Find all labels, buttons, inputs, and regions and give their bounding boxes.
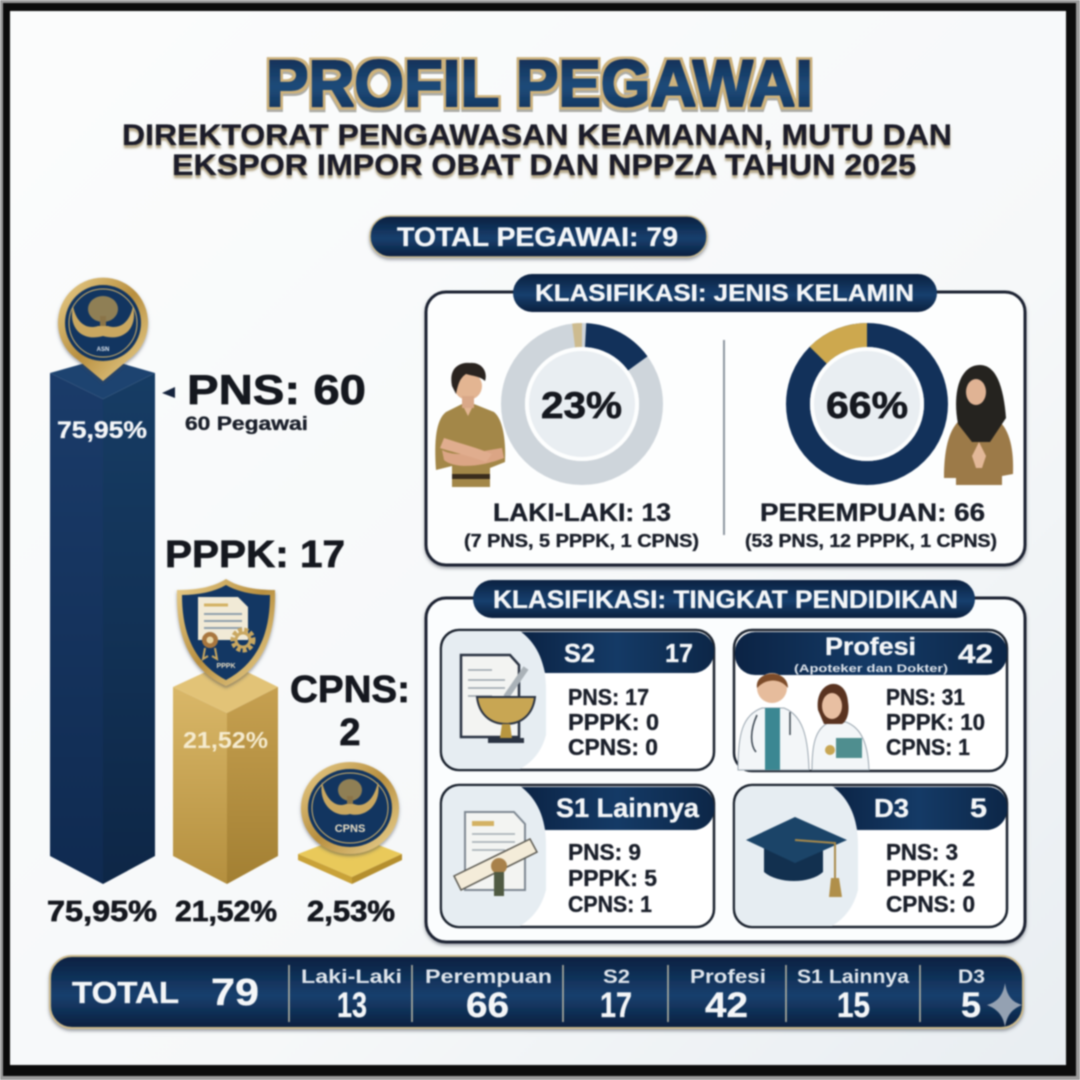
panel heading: jenis kelamin: KLASIFIKASI: JENIS KELAMIN xyxy=(535,280,914,307)
card: D3: 5 xyxy=(970,793,987,823)
perempuan caption: (53 PNS, 12 PPPK, 1 CPNS) xyxy=(745,531,997,551)
card: Profesi: 42 xyxy=(958,639,993,669)
subtitle: EKSPOR IMPOR OBAT DAN NPPZA TAHUN 2025 xyxy=(172,149,916,182)
percentages under bars xyxy=(47,896,395,928)
card: Profesi: CPNS: 1 xyxy=(886,734,970,760)
card: S2 xyxy=(441,630,714,770)
summary bar: 79 xyxy=(211,972,259,1014)
panel heading: jenis kelamin xyxy=(513,274,937,312)
label: CPNS 2: CPNS: xyxy=(290,669,410,711)
label: CPNS 2 xyxy=(290,669,410,754)
card: S2: PNS: 17 xyxy=(568,684,649,710)
badge: CPNS medal xyxy=(301,762,399,854)
laki-laki caption: (7 PNS, 5 PPPK, 1 CPNS) xyxy=(464,531,699,551)
label: PPPK 17: PPPK: 17 xyxy=(165,534,345,576)
subtitle: DIREKTORAT PENGAWASAN KEAMANAN, MUTU DAN xyxy=(122,119,952,152)
divider xyxy=(723,340,725,535)
figure: laki-laki xyxy=(435,363,505,487)
figure: doctors xyxy=(738,673,869,770)
laki-laki caption: LAKI-LAKI: 13 xyxy=(493,499,671,527)
summary bar: S1 Lainnya xyxy=(797,967,909,988)
summary bar: 66 xyxy=(466,986,509,1025)
card: Profesi: PPPK: 10 xyxy=(886,709,985,735)
percentages under bars: 75,95% xyxy=(47,896,157,928)
card: S1 Lainnya: S1 Lainnya xyxy=(556,793,700,823)
bar: PNS: 75,95% xyxy=(57,417,147,444)
card: Profesi: PNS: 31 xyxy=(886,684,965,710)
card: D3: PNS: 3 xyxy=(886,839,958,865)
bar: PNS xyxy=(50,358,155,884)
title: PROFIL PEGAWAI xyxy=(266,46,813,120)
icon: mortar and document xyxy=(461,655,535,743)
card: D3: D3 xyxy=(874,793,909,823)
panel: tingkat pendidikan xyxy=(426,580,1025,942)
icon: sparkle watermark xyxy=(987,983,1022,1027)
label: PNS 60: PNS: 60 xyxy=(187,366,366,413)
summary bar: 15 xyxy=(837,986,870,1025)
icon: diploma xyxy=(454,812,537,896)
percentages under bars: 2,53% xyxy=(307,896,395,928)
donut: laki-laki xyxy=(513,335,651,473)
summary bar: S2 xyxy=(603,967,630,988)
badge: PPPK shield: PPPK xyxy=(216,663,236,670)
card: S2: PPPK: 0 xyxy=(568,709,659,735)
card: D3: CPNS: 0 xyxy=(886,891,975,917)
card: S1 Lainnya: PNS: 9 xyxy=(568,839,641,865)
bar: CPNS plinth xyxy=(298,834,402,884)
panel: jenis kelamin xyxy=(426,274,1025,565)
summary bar: Profesi xyxy=(690,967,766,988)
card: Profesi: Profesi xyxy=(825,633,916,661)
badge: PPPK shield xyxy=(177,579,275,686)
perempuan caption xyxy=(745,499,997,551)
summary bar: 5 xyxy=(961,986,981,1025)
perempuan caption: PEREMPUAN: 66 xyxy=(760,499,985,527)
label: PNS 60: 60 Pegawai xyxy=(185,414,308,435)
bar: PPPK: 21,52% xyxy=(183,727,268,753)
badge: CPNS medal: CPNS xyxy=(335,823,365,835)
card: Profesi xyxy=(734,630,1007,771)
total pegawai pill: TOTAL PEGAWAI: 79 xyxy=(397,222,678,252)
summary bar: D3 xyxy=(958,967,985,988)
donut: perempuan xyxy=(798,335,936,473)
donut: laki-laki: 23% xyxy=(541,385,622,426)
panel heading: tingkat pendidikan: KLASIFIKASI: TINGKAT PENDIDIKAN xyxy=(493,586,958,614)
bar: PPPK xyxy=(173,662,278,884)
card: D3: PPPK: 2 xyxy=(886,865,975,891)
badge: PNS emblem: ASN xyxy=(97,347,109,353)
summary bar: TOTAL xyxy=(72,975,179,1010)
card: D3 xyxy=(734,785,1007,927)
card: S1 Lainnya xyxy=(441,785,714,927)
percentages under bars: 21,52% xyxy=(175,896,277,928)
icon: graduation cap xyxy=(746,817,847,897)
summary bar: Laki-Laki xyxy=(301,967,402,988)
summary bar: 42 xyxy=(705,986,748,1025)
badge: PNS emblem xyxy=(58,278,148,381)
label: CPNS 2: 2 xyxy=(339,712,361,754)
summary bar xyxy=(50,956,1023,1028)
summary bar: 13 xyxy=(337,986,367,1025)
label: PNS 60 xyxy=(185,366,366,435)
card: S1 Lainnya: CPNS: 1 xyxy=(568,891,652,917)
total pegawai pill xyxy=(370,216,707,257)
card: S2: 17 xyxy=(665,638,693,668)
arrow: PNS xyxy=(162,387,175,398)
laki-laki caption xyxy=(464,499,699,551)
donut: perempuan: 66% xyxy=(826,385,908,426)
subtitle xyxy=(122,119,952,182)
card: Profesi: (Apoteker dan Dokter) xyxy=(794,663,948,675)
card: S1 Lainnya: PPPK: 5 xyxy=(568,865,657,891)
card: S2: S2 xyxy=(564,638,595,668)
figure: perempuan xyxy=(944,365,1013,485)
panel heading: tingkat pendidikan xyxy=(473,580,975,618)
summary bar: Perempuan xyxy=(425,967,552,988)
summary bar: 17 xyxy=(600,986,632,1025)
card: S2: CPNS: 0 xyxy=(568,734,658,760)
